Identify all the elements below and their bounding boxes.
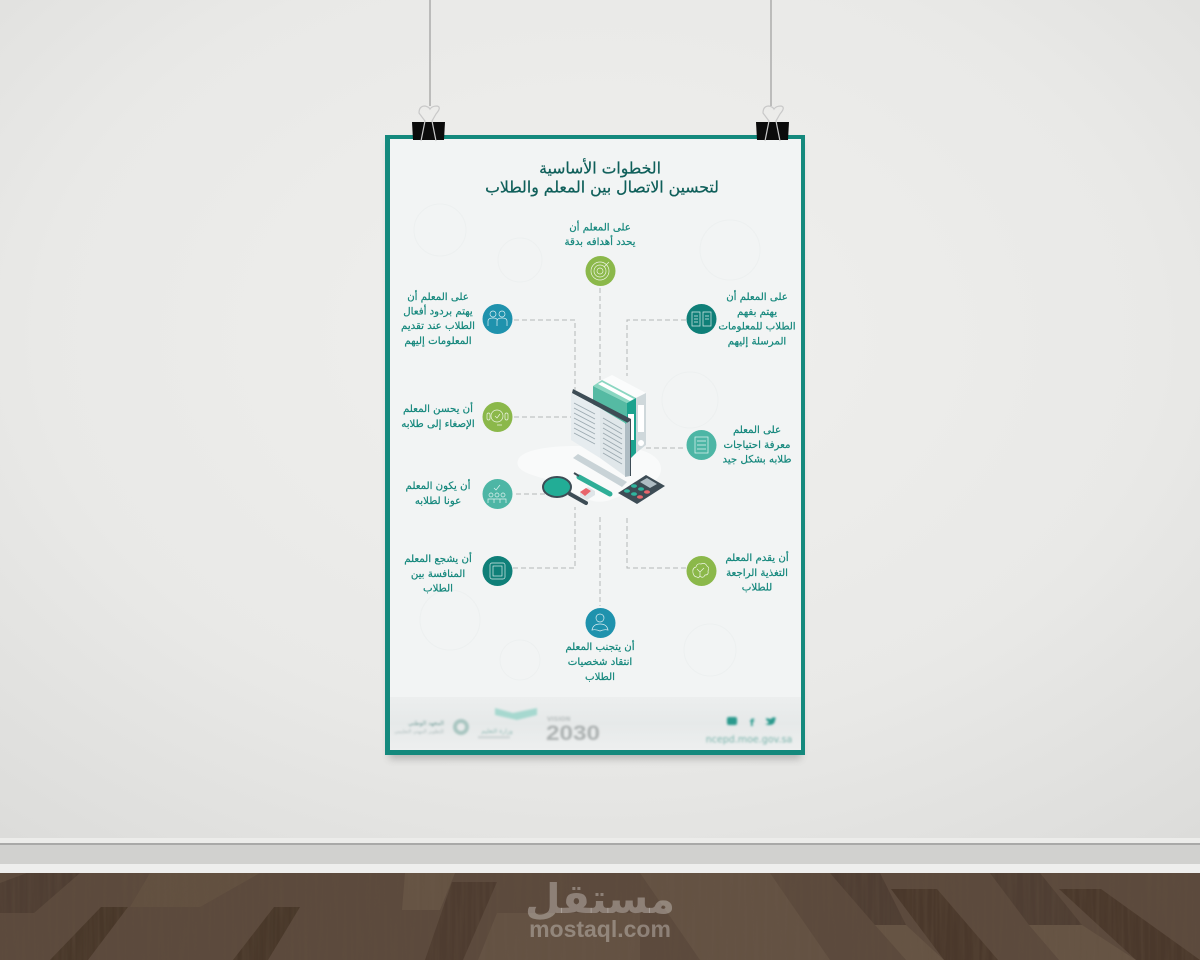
step: competition bbox=[404, 552, 512, 594]
text: أن يشجع المعلم bbox=[404, 552, 472, 565]
logo: ministry of education: وزارة التعليم bbox=[481, 728, 513, 735]
binder clip left bbox=[412, 106, 445, 141]
text: على المعلم أن bbox=[407, 290, 469, 303]
binder grey bbox=[602, 375, 646, 398]
icon: person bbox=[586, 608, 616, 638]
logo: vision 2030: VISION bbox=[547, 716, 571, 723]
hanging wires bbox=[430, 0, 771, 106]
ruler bbox=[573, 454, 627, 487]
social icons bbox=[727, 717, 776, 729]
text: أن يتجنب المعلم bbox=[565, 640, 635, 653]
text: للطلاب bbox=[742, 582, 772, 594]
central illustration: books and desk tools bbox=[517, 375, 665, 504]
website: ncepd.moe.gov.sa bbox=[706, 734, 792, 746]
text: التغذية الراجعة bbox=[726, 568, 788, 579]
text bbox=[565, 640, 635, 683]
icon: puzzle frame bbox=[482, 556, 512, 586]
text: على المعلم أن bbox=[726, 290, 788, 303]
pencil bbox=[579, 477, 610, 494]
text: أن يكون المعلم bbox=[406, 479, 471, 492]
text: على المعلم أن bbox=[569, 220, 631, 234]
poster bbox=[385, 135, 805, 755]
text: الطلاب bbox=[423, 584, 453, 594]
icon: checklist bbox=[686, 430, 716, 460]
text: المنافسة بين bbox=[411, 569, 465, 580]
logo: national centre bbox=[394, 720, 467, 735]
text: طلابه بشكل جيد bbox=[723, 454, 791, 466]
text: انتقاد شخصيات bbox=[568, 657, 632, 668]
step: feedback bbox=[686, 551, 789, 594]
text bbox=[406, 479, 471, 507]
title: لتحسين الاتصال بين المعلم والطلاب bbox=[485, 178, 719, 198]
binder teal bbox=[593, 380, 636, 403]
text: أن يحسن المعلم bbox=[403, 402, 473, 415]
connector lines bbox=[513, 288, 686, 606]
text bbox=[401, 402, 475, 430]
title bbox=[485, 158, 719, 198]
poster shadow bbox=[389, 142, 801, 759]
step: reactions bbox=[401, 290, 512, 347]
blob bbox=[517, 446, 661, 502]
icon: target bbox=[586, 256, 616, 286]
logo: vision 2030 bbox=[546, 716, 600, 745]
step: understanding bbox=[686, 290, 796, 348]
text: المعلومات إليهم bbox=[404, 336, 472, 347]
title: الخطوات الأساسية bbox=[539, 158, 661, 178]
step: needs bbox=[686, 425, 791, 466]
text: على المعلم bbox=[733, 425, 781, 436]
text: الطلاب bbox=[585, 672, 615, 683]
step: listening bbox=[401, 402, 512, 432]
logo: national centre: للتطوير المهني التعليمي bbox=[394, 729, 444, 735]
icon: helping team bbox=[482, 479, 512, 509]
binder clip right bbox=[756, 106, 789, 141]
step top: goals bbox=[564, 220, 636, 286]
icon: people bbox=[482, 304, 512, 334]
faint background pattern bbox=[414, 204, 760, 680]
text bbox=[401, 290, 475, 347]
icon: open book bbox=[686, 304, 716, 334]
text: أن يقدم المعلم bbox=[725, 551, 789, 564]
icon: brain bbox=[686, 556, 716, 586]
watermark: مستقل bbox=[525, 875, 675, 923]
text: المرسلة إليهم bbox=[728, 336, 786, 348]
magnifier bbox=[570, 494, 586, 503]
text: الطلاب عند تقديم bbox=[401, 321, 475, 332]
text: معرفة احتياجات bbox=[724, 440, 790, 451]
text: يهتم بفهم bbox=[737, 307, 777, 318]
logo: ministry of education bbox=[478, 708, 537, 738]
open book bbox=[572, 389, 631, 476]
text bbox=[404, 552, 472, 594]
text: الإصغاء إلى طلابه bbox=[401, 419, 475, 430]
footer band bbox=[390, 697, 801, 750]
baseboard bbox=[0, 838, 1200, 873]
social icons: f bbox=[750, 718, 755, 729]
watermark: mostaql.com bbox=[529, 916, 671, 942]
text: يحدد أهدافه بدقة bbox=[564, 235, 636, 248]
step bottom: avoid criticism bbox=[565, 608, 635, 683]
text bbox=[564, 220, 636, 248]
logo: national centre: المعهد الوطني bbox=[408, 720, 444, 727]
step: support bbox=[406, 479, 512, 509]
text bbox=[723, 425, 791, 466]
icon: headset bbox=[482, 402, 512, 432]
wooden floor bbox=[0, 873, 1200, 960]
eraser bbox=[580, 487, 595, 500]
logo: vision 2030: 2030 bbox=[546, 722, 600, 745]
text bbox=[718, 290, 796, 348]
text bbox=[725, 551, 789, 594]
text: يهتم بردود أفعال bbox=[403, 304, 473, 318]
text: عونا لطلابه bbox=[415, 496, 461, 507]
text: الطلاب للمعلومات bbox=[718, 322, 796, 332]
calculator bbox=[618, 475, 665, 504]
